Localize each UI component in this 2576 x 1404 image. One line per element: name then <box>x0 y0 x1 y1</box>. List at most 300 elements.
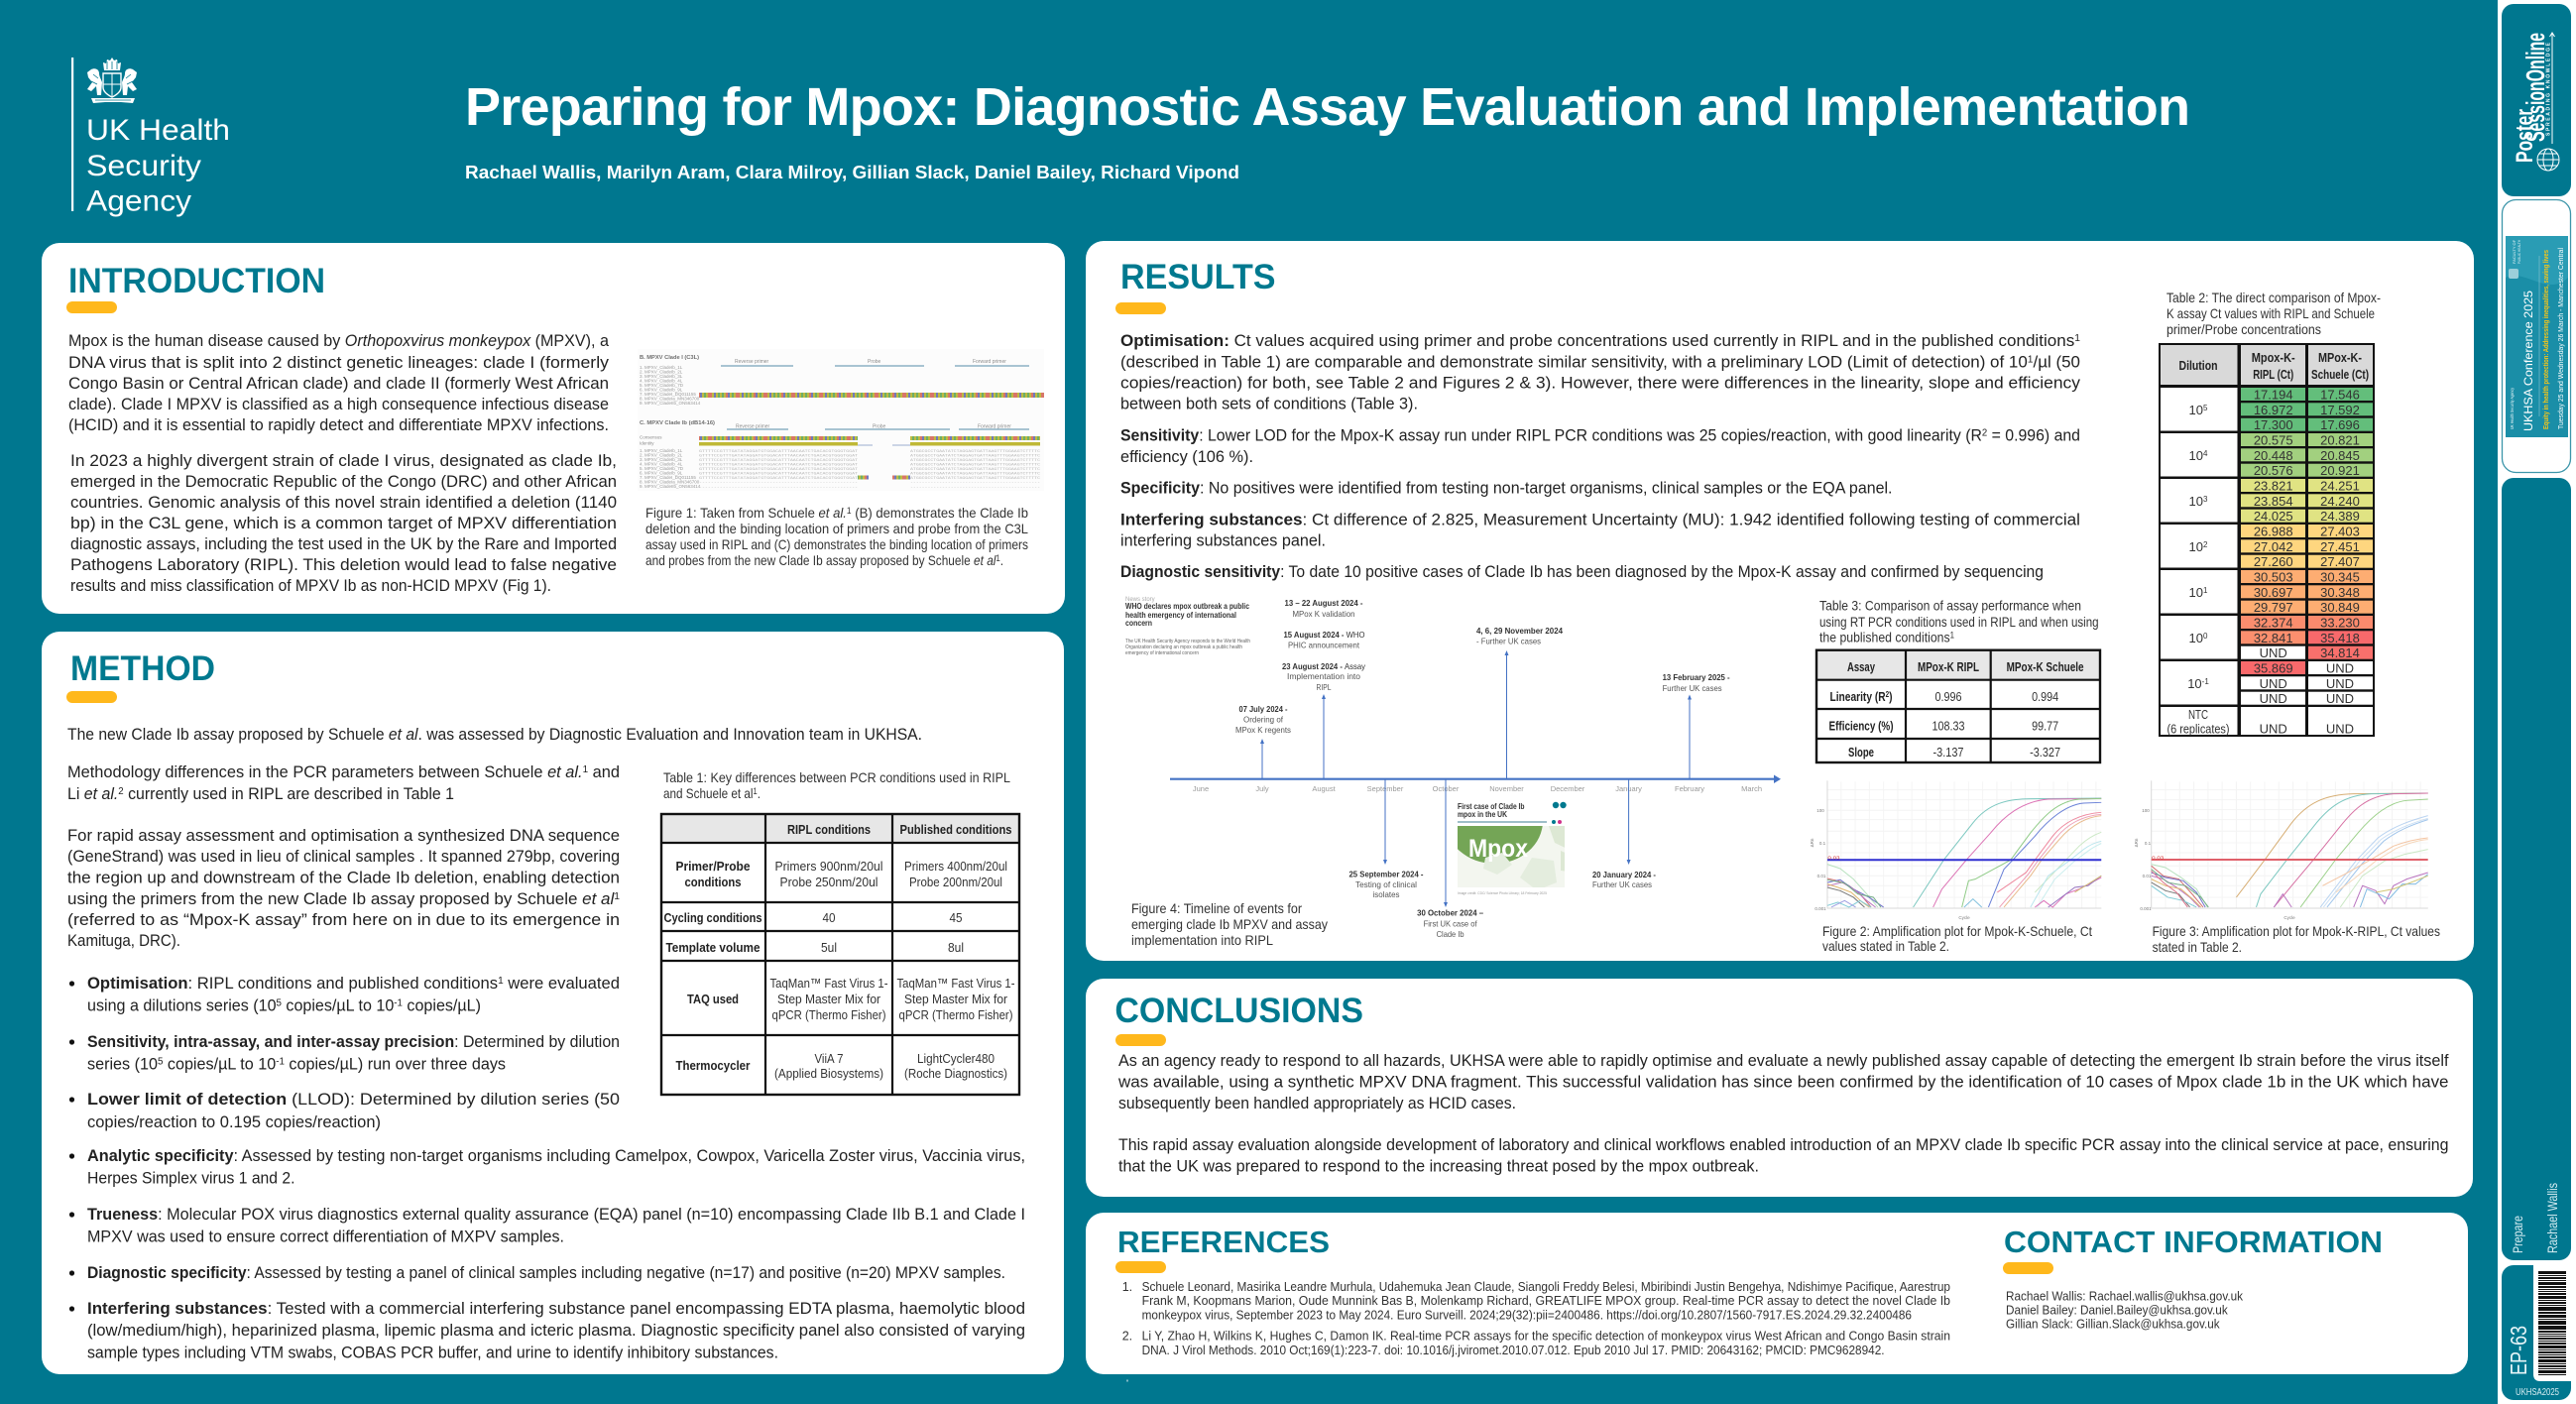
text: results findings: between both sets of conditions (Table 3). <box>1120 395 1418 412</box>
table 2: ct values heat table: 10 <box>2189 403 2203 417</box>
table 1: (Applied Biosystems) <box>774 1066 883 1081</box>
text: conclusions <box>1117 1052 2449 1176</box>
text: method intro: using the primers from the new Clade Ib assay proposed by Schuele et al <box>67 890 613 908</box>
figure 1: sequence alignment: GTTTTCCGTTTGATATAGGATGTGGACATTTAACAATCTGACACGTGGGTGGAT <box>699 468 859 472</box>
table 2: ct values heat table: 26.988 <box>2254 524 2293 539</box>
table 1: Primers 900nm/20ul <box>775 859 883 874</box>
text: results findings: interfering substances panel. <box>1120 531 1326 549</box>
bullet list: method steps: 5 <box>158 1057 164 1067</box>
table 2 caption <box>2166 290 2381 337</box>
timeline events: MPox K regents <box>1235 725 1291 735</box>
text: results findings: Interfering substances : Ct difference of 2.825, Measurement Uncertainty (MU): 1.942 identified following testing of commercial <box>1120 512 2080 529</box>
figure 1: sequence alignment: 1. MPXV_CladeIb_1L <box>640 365 683 370</box>
figure 1 caption: assay used in RIPL and (C) demonstrates the binding location of primers <box>645 536 1028 552</box>
timeline events, left aligned: 13 February 2025 - <box>1663 672 1730 682</box>
figure 1: sequence alignment: ATGGCGCCTGAATATCTAGGAGTGATTAAGTTTGGAAGTCTTTTC <box>910 454 1041 458</box>
bullet list: method steps: Diagnostic specificity: Assessed by testing a panel of clinical samples including negative (n=17) and positive (n=20) MPXV samples. <box>87 1264 1005 1282</box>
text: method intro: For rapid assay assessment and optimisation a synthesized DNA sequence <box>67 827 620 845</box>
timeline events, left aligned: 4, 6, 29 November 2024 <box>1476 626 1563 636</box>
image: first case of clade Ib mpox in the UK: Mpox <box>1468 835 1528 863</box>
table 1: Template volume <box>666 940 760 955</box>
chart: figure 3 amplification plot, Mpox-K-RIPL: 0.001 <box>2140 906 2152 911</box>
chart: figure 3 amplification plot, Mpox-K-RIPL: ΔRn <box>2134 838 2139 847</box>
table 3: assay performance: -3.137 <box>1933 745 1963 760</box>
sidebar: poster session online logo <box>2502 4 2571 196</box>
table 1: 40 <box>823 910 835 925</box>
timeline events: MPox K validation <box>1293 609 1355 619</box>
month labels: December <box>1551 784 1585 793</box>
sidebar: poster number and barcode <box>2502 1265 2572 1400</box>
chart: figure 2 amplification plot, Mpox-K-Schuele: Cycle <box>1958 915 1970 920</box>
table 2: ct values heat table: 27.042 <box>2254 539 2293 554</box>
text: results findings <box>1120 332 2081 581</box>
month labels: November <box>1489 784 1524 793</box>
table 2: ct values heat table: 1 <box>2203 586 2208 595</box>
table 2: ct values heat table: 30.503 <box>2254 569 2293 585</box>
table 2: ct values heat table: 35.418 <box>2320 631 2360 645</box>
month labels: August <box>1312 784 1337 793</box>
table 2: ct values heat table: 24.025 <box>2254 509 2293 524</box>
text: results findings: copies/reaction) for both, see Table 2 and Figures 2 & 3). However, there were differences in the linearity, slope and efficiency <box>1120 375 2081 393</box>
table 1: Probe 200nm/20ul <box>909 875 1002 889</box>
bullet list: method steps: using a dilutions series (10 <box>87 997 281 1015</box>
table 1: Probe 250nm/20ul <box>779 875 878 889</box>
table 1: Primer/Probe <box>676 859 750 874</box>
sidebar: poster session online logo: Poster <box>2512 109 2538 163</box>
table 2: ct values heat table: 20.845 <box>2320 448 2360 463</box>
table 2: ct values heat table: -1 <box>2202 677 2209 686</box>
table 2: ct values heat table: 17.546 <box>2320 387 2360 403</box>
title: Preparing for Mpox: Diagnostic Assay Evaluation and Implementation <box>465 77 2190 137</box>
text: conclusions: that the UK was prepared to respond to the increasing threat posed by the mpox outbreak. <box>1118 1158 1759 1176</box>
figure 4 caption: implementation into RIPL <box>1131 932 1273 948</box>
table 3: assay performance: 2 <box>1886 690 1890 699</box>
month labels: June <box>1193 784 1209 793</box>
heading: references: REFERENCES <box>1117 1225 1330 1259</box>
month labels <box>1193 784 1762 793</box>
figure 1: sequence alignment: Forward primer <box>973 359 1006 365</box>
text: conclusions: was available, using a synthetic MPXV DNA fragment. This successful validation has since been confirmed by the identification of 10 cases of Mpox clade 1b in the UK which have <box>1117 1074 2449 1092</box>
text: method intro: the region up and downstream of the Clade Ib deletion, enabling detection <box>67 869 620 886</box>
table 3 caption: the published conditions <box>1819 630 1968 645</box>
table 2: ct values heat table: 24.389 <box>2320 509 2360 524</box>
table 2: ct values heat table: (6 replicates) <box>2167 722 2229 736</box>
text: contact details: Gillian Slack: Gillian.Slack@ukhsa.gov.uk <box>2006 1317 2220 1331</box>
text: results findings: 2 <box>1982 428 1988 438</box>
news story snippet: concern <box>1125 618 1152 628</box>
timeline events: 23 August 2024 - Assay <box>1282 661 1366 671</box>
text: conclusions: subsequently been handled appropriately as HCID cases. <box>1118 1095 1516 1112</box>
table 2: ct values heat table: 20.576 <box>2254 463 2293 478</box>
figure 1 caption: and probes from the new Clade Ib assay proposed by Schuele et al <box>645 552 1029 568</box>
table 1: Cycling conditions <box>664 910 761 925</box>
table 1: qPCR (Thermo Fisher) <box>771 1007 886 1022</box>
timeline events: 07 July 2024 - <box>1239 704 1288 714</box>
table 1: 45 <box>950 910 962 925</box>
figure 1: sequence alignment: ATGGCGCCTGAATATCTAGGAGTGATTAAGTTTGGAAGTCTTTTC <box>910 459 1041 463</box>
chart: figure 2 amplification plot, Mpox-K-Schuele: 100 <box>1816 808 1824 813</box>
bullet list: method steps: copies/reaction to 0.195 copies/reaction) <box>87 1113 381 1131</box>
timeline events: 25 September 2024 - <box>1348 870 1424 879</box>
text: method intro: and <box>588 763 620 781</box>
text: introduction paragraph 1: Congo Basin or Central African clade) and clade II (formerly West African <box>68 375 609 393</box>
table 2: ct values heat table: 17.194 <box>2254 387 2293 403</box>
figure 1: sequence alignment: ATGGCGCCTGAATATCTAGGAGTGATTAAGTTTGGAAGTCTTTTC <box>910 464 1041 468</box>
table 3: assay performance: -3.327 <box>2030 745 2060 760</box>
accent pill <box>1115 1034 1166 1046</box>
text: method intro: (GeneStrand) was used in lieu of clinical samples . It spanned 279bp, covering <box>67 848 620 866</box>
news story snippet <box>1125 597 1250 656</box>
bullet list: method steps: Lower limit of detection (LLOD): Determined by dilution series (50 <box>87 1091 620 1109</box>
text: reference list: Frank M, Koopmans Marion, Oude Munnink Bas B, Molenkamp Richard, GREATLIFE MPOX group. Real-time PCR assay to detect the novel Clade Ib <box>1142 1294 1950 1308</box>
figure 1: sequence alignment: Identity <box>640 440 654 446</box>
table 2: ct values heat table: 30.849 <box>2320 600 2360 615</box>
barcode <box>2538 1271 2566 1375</box>
bullet list: method steps: 5 <box>277 997 282 1009</box>
chart: figure 3 amplification plot, Mpox-K-RIPL: 100 <box>2142 808 2150 813</box>
timeline events: 13 – 22 August 2024 - <box>1285 598 1363 608</box>
table 1: TaqMan™ Fast Virus 1- <box>896 976 1015 991</box>
figure 1: sequence alignment: 2. MPXV_CladeIb_2L <box>640 452 683 458</box>
figure 1: sequence alignment: GTTTTCCGTTTGATATAGGATGTGGACATTTAACAATCTGACACGTGGGTGGAT <box>699 472 859 476</box>
table 1: 5ul <box>821 940 837 955</box>
table 1: Published conditions <box>900 822 1011 837</box>
sidebar: poster title and author: Rachael Wallis <box>2544 1183 2560 1253</box>
table 1 caption: . <box>758 785 761 801</box>
figure 1: sequence alignment: Consensus <box>640 434 662 440</box>
figure 1: sequence alignment: 9. MPXV_CladeIIb_ON563414 <box>640 401 701 406</box>
text: reference list <box>1122 1280 1950 1357</box>
text: reference list: Schuele Leonard, Masirika Leandre Murhula, Udahemuka Jean Claude, Siangoli Freddy Belesi, Mbiribindi Justin Bengehya, Ndishimye Pacifique, Aarestrup <box>1142 1280 1950 1294</box>
table 3: assay performance: 0.994 <box>2032 689 2058 704</box>
figure 1: sequence alignment: Reverse primer <box>735 359 769 365</box>
bullet list: method steps <box>69 975 1025 1362</box>
accent pill <box>1115 302 1166 314</box>
table 2: ct values heat table: MPox-K- <box>2318 350 2362 365</box>
logo wordmark: UK Health <box>86 114 230 147</box>
figure 1: sequence alignment: ATGGCGCCTGAATATCTAGGAGTGATTAAGTTTGGAAGTCTTTTC <box>910 472 1041 476</box>
figure 1: sequence alignment: ------------------------------------------------------ <box>699 482 858 486</box>
table 1: Primers 400nm/20ul <box>904 859 1007 874</box>
table 2: ct values heat table: UND <box>2326 691 2354 706</box>
text: introduction paragraph 2 <box>70 452 617 595</box>
sidebar <box>2498 0 2576 1404</box>
text: results findings: efficiency (106 %). <box>1120 448 1253 466</box>
bullet list: method steps: were evaluated <box>504 975 620 993</box>
table 3: assay performance: MPox-K Schuele <box>2007 659 2084 674</box>
figure 1: sequence alignment: 5. MPXV_CladeIb_7D <box>640 466 684 471</box>
sidebar: conference banner <box>2503 200 2570 472</box>
table 3 caption: using RT PCR conditions used in RIPL and when using <box>1819 614 2099 630</box>
panel: conclusions <box>1086 979 2473 1197</box>
timeline events <box>1235 598 1483 939</box>
accent pill <box>1115 1261 1166 1273</box>
figure 1: sequence alignment: GTTTTCCGTTTGATATAGGATGTGGACATTTAACAATCTGACACGTGGGTGGAT <box>699 459 859 463</box>
text: results findings: Diagnostic sensitivity: To date 10 positive cases of Clade Ib has been diagnosed by the Mpox-K assay and confirmed by sequencing <box>1120 563 2044 581</box>
table 2: ct values heat table: 30.697 <box>2254 585 2293 600</box>
text: reference list: monkeypox virus, September 2023 to May 2024. Euro Surveill. 2024;29(32):pii=2400486. https://doi.org/10.2807/1560-7917.ES.2024.29.32.2400486 <box>1142 1309 1912 1323</box>
bullet list: method steps: Herpes Simplex virus 1 and 2. <box>87 1170 295 1188</box>
figure 1 caption: deletion and the binding location of primers and probe from the C3L <box>645 521 1028 536</box>
figure 4 caption <box>1131 900 1328 948</box>
table 1: qPCR (Thermo Fisher) <box>898 1007 1013 1022</box>
timeline events, left aligned: - Further UK cases <box>1476 637 1541 646</box>
table 2: ct values heat table: UND <box>2260 645 2287 660</box>
text: reference list: 2. <box>1122 1329 1132 1343</box>
table 1: Step Master Mix for <box>777 992 881 1006</box>
sidebar: conference banner: UK Health Security Agency <box>2510 387 2515 429</box>
timeline events, left aligned: Further UK cases <box>1663 683 1722 693</box>
timeline event arrows <box>1260 650 1692 907</box>
heading: method: METHOD <box>70 649 215 688</box>
news story snippet: News story <box>1125 597 1155 603</box>
figure 1: sequence alignment: GTTTTCCGTTTGATATAGGATGTGGACATTTAACAATCTGACACGTGGGTGGAT <box>699 477 859 481</box>
table 3 caption: Table 3: Comparison of assay performance when <box>1819 598 2081 614</box>
table 1: (Roche Diagnostics) <box>904 1066 1007 1081</box>
table 3: assay performance: 99.77 <box>2032 719 2058 734</box>
chart: figure 2 amplification plot, Mpox-K-Schuele: 0.001 <box>1815 906 1826 911</box>
figure 3 caption: Figure 3: Amplification plot for Mpok-K-RIPL, Ct values <box>2153 923 2440 939</box>
table 2: ct values heat table: 20.575 <box>2254 432 2293 448</box>
sidebar: poster number and barcode: UKHSA2025 <box>2516 1386 2559 1398</box>
bullet list: method steps: MPXV was used to ensure correct differentiation of MXPV samples. <box>87 1228 564 1245</box>
text: conclusions: As an agency ready to respond to all hazards, UKHSA were able to rapidly optimise and evaluate a newly published assay capable of detecting the emergent Ib strain before the virus itself <box>1118 1052 2449 1070</box>
table 2: ct values heat table: Dilution <box>2179 358 2218 373</box>
figure 1: sequence alignment: Reverse primer <box>736 424 770 430</box>
month labels: February <box>1675 784 1704 793</box>
figure 4 caption: emerging clade Ib MPXV and assay <box>1131 916 1328 932</box>
text: reference list: Li Y, Zhao H, Wilkins K, Hughes C, Damon IK. Real-time PCR assays for the specific detection of monkeypox virus West African and Congo Basin strain <box>1142 1329 1950 1343</box>
table 2: ct values heat table: 4 <box>2203 449 2208 458</box>
figure 1: sequence alignment: 7. MPXV_CladeI_DQ011155 <box>640 392 696 397</box>
figure 1: sequence alignment: 4. MPXV_CladeIb_4L <box>640 379 683 383</box>
table 2 caption: K assay Ct values with RIPL and Schuele <box>2166 305 2375 321</box>
sidebar: poster title and author: Prepare <box>2510 1216 2525 1253</box>
text: contact details <box>2006 1289 2244 1331</box>
table 1 caption: and Schuele et al <box>663 785 770 801</box>
text: results findings: 1 <box>2074 333 2080 344</box>
text: introduction paragraph 2: countries. Genomic analysis of this novel strain identified a deletion (1140 <box>70 494 617 512</box>
text: reference list: 1. <box>1122 1280 1132 1294</box>
figure 1: sequence alignment: ATGGCGCCTGAATATCTAGGAGTGATTAAGTTTGGAAGTCTTTTC <box>910 468 1041 472</box>
text: results findings: (described in Table 1) are comparable and demonstrate similar sensitivity, with a preliminary LOD (Limit of detection) of 10 <box>1120 353 2003 371</box>
table 2: ct values heat table: 20.921 <box>2320 463 2360 478</box>
accent pill <box>66 691 117 703</box>
table 1: TaqMan™ Fast Virus 1- <box>769 976 888 991</box>
bullet list: method steps: copies/µL) <box>403 997 481 1015</box>
table 2: ct values heat table: 20.448 <box>2254 448 2293 463</box>
chart: figure 2 amplification plot, Mpox-K-Schuele <box>1810 780 2101 920</box>
table 2: ct values heat table: Mpox-K- <box>2252 350 2295 365</box>
sidebar: conference banner: PUBLIC HEALTH <box>2517 240 2521 264</box>
timeline events: Ordering of <box>1243 715 1284 725</box>
bullet list: method steps: sample types including VTM swabs, COBAS PCR buffer, and urine to identify inhibitory substances. <box>87 1345 778 1362</box>
figure 3 caption <box>2153 923 2440 955</box>
image: first case of clade Ib mpox in the UK: mpox in the UK <box>1458 809 1508 819</box>
table 1: ViiA 7 <box>815 1051 843 1066</box>
chart: figure 2 amplification plot, Mpox-K-Schuele: 0.1 <box>1819 841 1826 846</box>
chart: figure 2 amplification plot, Mpox-K-Schuele: ΔRn <box>1810 838 1815 847</box>
table 2: ct values heat table: 34.814 <box>2320 645 2360 660</box>
sidebar: poster session online logo: SPREADING KNOWLEDGE <box>2546 42 2552 136</box>
timeline events: 30 October 2024 – <box>1417 908 1483 918</box>
text: method intro <box>67 726 922 950</box>
text: reference list: DNA. J Virol Methods. 2010 Oct;169(1):223-7. doi: 10.1016/j.jviromet.2010.07.012. Epub 2010 Jul 17. PMID: 20643162; PMCID: PMC9628942. <box>1142 1344 1885 1357</box>
figure 2 caption: Figure 2: Amplification plot for Mpok-K-Schuele, Ct <box>1822 923 2092 939</box>
news story snippet: health emergency of international <box>1125 610 1236 620</box>
text: method intro: currently used in RIPL are described in Table 1 <box>124 785 454 803</box>
news story snippet: Organization declaring an mpox outbreak a public health <box>1125 644 1242 650</box>
timeline events: Testing of clinical <box>1355 879 1417 889</box>
text: introduction paragraph 2: In 2023 a highly divergent strain of clade I virus, designated as clade Ib, <box>70 452 617 470</box>
text: introduction paragraph 2: bp) in the C3L gene, which is a common target of MPXV differentiation <box>70 515 617 532</box>
figure 1 caption: (B) demonstrates the Clade Ib <box>852 505 1028 521</box>
figure 1: sequence alignment: Probe <box>873 424 886 430</box>
table 2: ct values heat table: UND <box>2326 722 2354 736</box>
table 2: ct values heat table: 30.348 <box>2320 585 2360 600</box>
authors: Rachael Wallis, Marilyn Aram, Clara Milroy, Gillian Slack, Daniel Bailey, Richard Vipond <box>465 163 1239 182</box>
table 2: ct values heat table: 10 <box>2189 539 2203 554</box>
figure 3 caption: stated in Table 2. <box>2153 939 2242 955</box>
table 2: ct values heat table: 17.300 <box>2254 417 2293 432</box>
logo wordmark: Agency <box>86 184 191 218</box>
month labels: October <box>1433 784 1460 793</box>
table 2: ct values heat table: 27.451 <box>2320 539 2360 554</box>
panel: references and contact <box>1086 1213 2468 1374</box>
figure 1: sequence alignment: 8. MPXV_CladeIa_MN346700 <box>640 397 700 401</box>
table 2: ct values heat table: UND <box>2326 676 2354 691</box>
table 3: assay performance: Slope <box>1848 745 1874 760</box>
figure 1: sequence alignment: GTTTTCCGTTTGATATAGGATGTGGACATTTAACAATCTGACACGTGGGTGGAT <box>699 450 859 454</box>
figure 1: sequence alignment: 6. MPXV_CladeIb_9L <box>640 470 683 476</box>
figure 1: sequence alignment: 7. MPXV_CladeI_DQ011155 <box>640 475 696 480</box>
text: method intro: 1 <box>614 891 620 902</box>
table 2: ct values heat table: UND <box>2260 676 2287 691</box>
panel: results <box>1086 241 2474 961</box>
text: introduction paragraph 2: diagnostic assays, including the test used in the UK by the Rare and Imported <box>70 535 617 553</box>
table 2: ct values heat table: 16.972 <box>2254 403 2293 417</box>
bullet list: method steps: copies/µL to 10 <box>282 997 394 1015</box>
figure 1: sequence alignment: ------------------------------------------------------ <box>699 486 858 490</box>
panel: method <box>42 632 1064 1374</box>
table 2 caption: primer/Probe concentrations <box>2166 321 2321 337</box>
table 2 caption: Table 2: The direct comparison of Mpox- <box>2166 290 2381 305</box>
chart: figure 2 amplification plot, Mpox-K-Schuele: 0.03 <box>1827 856 1840 861</box>
logo wordmark <box>86 114 230 218</box>
table 1: 8ul <box>948 940 964 955</box>
table 1 caption: Table 1: Key differences between PCR conditions used in RIPL <box>663 769 1010 785</box>
table 3: assay performance: Linearity (R <box>1830 689 1901 704</box>
table 2: ct values heat table: 29.797 <box>2254 600 2293 615</box>
month labels: September <box>1367 784 1404 793</box>
figure 1: sequence alignment: ATGGCGCCTGAATATCTAGGAGTGATTAAGTTTGGAAGTCTTTTC <box>910 450 1041 454</box>
table 2: ct values heat table: 27.260 <box>2254 554 2293 569</box>
news story snippet: The UK Health Security Agency responds to the World Health <box>1125 639 1250 644</box>
table 2: ct values heat table: NTC <box>2188 707 2208 722</box>
bullet list: method steps: Interfering substances : Tested with a commercial interfering substance panel encompassing EDTA plasma, haemolytic blood <box>87 1300 1025 1318</box>
text: introduction paragraph 1: clade). Clade I MPXV is classified as a high consequence infectious disease <box>68 396 609 413</box>
table 2: ct values heat table: 3 <box>2203 495 2208 504</box>
sidebar: conference banner: Equity in health protection: Addressing inequalities, saving lives <box>2543 250 2550 429</box>
bullet list: method steps: Trueness: Molecular POX virus diagnostics external quality assurance (EQA) panel (n=10) encompassing Clade IIb B.1 and Clade I <box>87 1206 1025 1224</box>
figure 2 caption: values stated in Table 2. <box>1822 938 1949 954</box>
figure 1: sequence alignment <box>638 349 1044 491</box>
heading: conclusions: CONCLUSIONS <box>1114 992 1363 1030</box>
table 2: ct values heat table: 10 <box>2189 585 2203 600</box>
text: results findings: = 0.996) and <box>1987 426 2080 444</box>
sidebar: poster number and barcode: EP-63 <box>2506 1326 2531 1375</box>
text: introduction paragraph 1 <box>68 332 610 434</box>
figure 1 caption: . <box>1000 552 1003 568</box>
bullet list: method steps: copies/µL to 10 <box>163 1055 276 1073</box>
timeline events, left aligned <box>1476 626 1730 889</box>
bullet list: method steps: -1 <box>394 997 403 1009</box>
table 2: ct values heat table: RIPL (Ct) <box>2253 367 2293 382</box>
chart: figure 3 amplification plot, Mpox-K-RIPL <box>2134 780 2428 920</box>
table 2: ct values heat table: 10 <box>2189 494 2203 509</box>
text: results findings: /µl (50 <box>2034 353 2080 371</box>
table 3 caption: 1 <box>1950 631 1954 641</box>
timeline events, left aligned: Further UK cases <box>1592 879 1652 889</box>
table 2: ct values heat table: 17.696 <box>2320 417 2360 432</box>
text: results findings: 1 <box>2028 355 2034 365</box>
month labels: March <box>1741 784 1762 793</box>
table 2: ct values heat table: 2 <box>2203 540 2208 549</box>
text: results findings: Optimisation: Ct values acquired using primer and probe concentrations used currently in RIPL and in the published conditions <box>1120 332 2048 350</box>
table 2: ct values heat table: 0 <box>2203 632 2208 641</box>
text: introduction paragraph 1: DNA virus that is split into 2 distinct genetic lineages: clade I (formerly <box>68 354 610 372</box>
table 1 caption: 1 <box>754 786 758 796</box>
figure 2 caption <box>1822 923 2092 954</box>
text: method intro: Kamituga, DRC). <box>67 932 180 950</box>
text: method intro: 1 <box>583 764 589 775</box>
table 3: assay performance: Assay <box>1847 659 1876 674</box>
heading: introduction: INTRODUCTION <box>68 262 325 300</box>
figure 1: sequence alignment: 3. MPXV_CladeIb_3L <box>640 457 683 462</box>
table 2: ct values heat table: 17.592 <box>2320 403 2360 417</box>
text: method intro: The new Clade Ib assay proposed by Schuele et al. was assessed by Diagnostic Evaluation and Innovation team in UKHSA. <box>67 726 922 744</box>
table 2: ct values heat table: 10 <box>2189 631 2203 645</box>
chart: figure 3 amplification plot, Mpox-K-RIPL: 0.1 <box>2145 841 2152 846</box>
table 2: ct values heat table: UND <box>2260 691 2287 706</box>
table 2: ct values heat table: 33.230 <box>2320 615 2360 631</box>
table 1: RIPL conditions <box>787 822 871 837</box>
figure 1: sequence alignment: 4. MPXV_CladeIb_4L <box>640 462 683 466</box>
month labels: July <box>1255 784 1269 793</box>
text: introduction paragraph 2: emerged in the Democratic Republic of the Congo (DRC) and other African <box>70 473 617 491</box>
bullet list: method steps: Optimisation: RIPL conditions and published conditions <box>87 975 496 993</box>
icon: royal crest <box>87 58 137 103</box>
text: contact details: Rachael Wallis: Rachael.wallis@ukhsa.gov.uk <box>2006 1289 2244 1303</box>
table 2: ct values heat table: 23.821 <box>2254 478 2293 494</box>
text: introduction paragraph 2: results and miss classification of MPXV Ib as non-HCID MPXV (Fig 1). <box>70 577 551 595</box>
text: method intro: 2 <box>118 786 124 797</box>
table 2: ct values heat table: 27.403 <box>2320 524 2360 539</box>
icon: globe <box>2537 149 2559 171</box>
figure 1 caption: Figure 1: Taken from Schuele et al. <box>645 505 849 521</box>
image: first case of clade Ib mpox in the UK: First case of Clade Ib <box>1458 801 1525 811</box>
figure 1: sequence alignment: 6. MPXV_CladeIb_9L <box>640 387 683 393</box>
timeline events: Implementation into <box>1287 671 1360 681</box>
chart: figure 2 amplification plot, Mpox-K-Schuele: 0.01 <box>1817 874 1826 878</box>
table 2: ct values heat table: 5 <box>2203 404 2208 412</box>
table 2: ct values heat table: UND <box>2260 722 2287 736</box>
bullet list: method steps: series (10 <box>87 1055 159 1073</box>
table 2: ct values heat table: 24.251 <box>2320 478 2360 494</box>
panel: introduction <box>42 243 1065 614</box>
table 1: LightCycler480 <box>917 1051 995 1066</box>
table 1: TAQ used <box>687 992 739 1006</box>
